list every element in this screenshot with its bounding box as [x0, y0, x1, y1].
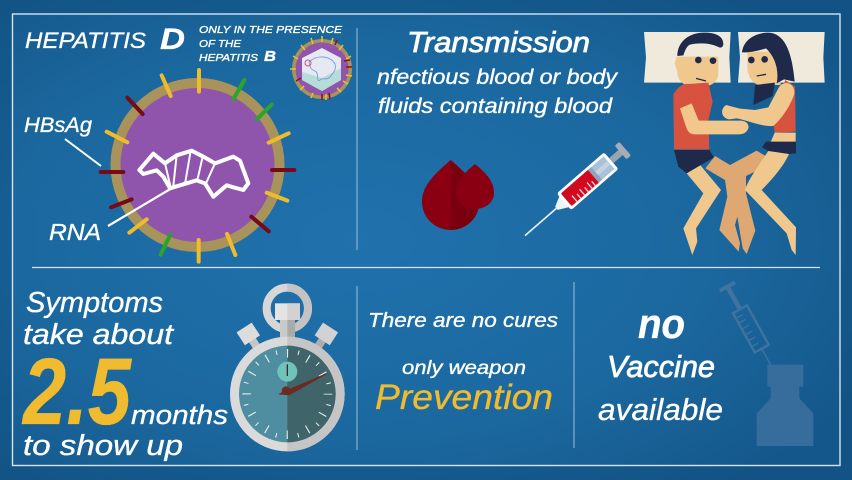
text: transmission routes: fluids containing blood	[378, 95, 613, 118]
text: available: available	[598, 392, 723, 427]
label: HBsAg with pointer: HBsAg	[24, 114, 92, 137]
pillows	[644, 32, 825, 83]
heading: transmission: Transmission	[407, 27, 590, 59]
heading: hepatitis D	[25, 23, 185, 56]
text: symptoms take about	[23, 287, 175, 351]
text: transmission routes	[377, 66, 619, 118]
label: RNA with pointer: RNA	[49, 219, 101, 245]
panel: no vaccine	[598, 282, 813, 446]
panel: transmission	[377, 27, 825, 255]
heading: hepatitis D: HEPATITIS	[25, 28, 146, 53]
text: to show up: to show up	[23, 430, 183, 462]
icon: stopwatch	[230, 288, 345, 451]
text: months: months	[131, 400, 228, 430]
icon: hepatitis B virus	[290, 36, 352, 100]
text: transmission routes: nfectious blood or body	[377, 66, 619, 89]
man	[673, 33, 767, 255]
surface antigen spikes	[101, 70, 294, 262]
text: vaccine: Vaccine	[607, 349, 715, 384]
woman	[722, 33, 796, 255]
panel: hepatitis D virus	[24, 23, 352, 262]
icon: faded syringe and vial	[720, 282, 813, 446]
icon: blood drops	[422, 160, 494, 230]
panel: no cures	[368, 310, 558, 417]
text: symptoms take about: Symptoms	[26, 287, 163, 319]
text: no: no	[638, 300, 685, 347]
text: there are no cures: There are no cures	[368, 310, 558, 332]
number: 2.5: 2.5	[21, 339, 132, 445]
note: only in the presence of hepatitis B: OF THE	[199, 38, 242, 50]
virus body	[110, 78, 284, 252]
RNA strand	[139, 151, 248, 197]
note: only in the presence of hepatitis B	[199, 24, 343, 65]
text: only weapon: only weapon	[402, 358, 526, 379]
label: HBsAg with pointer	[24, 114, 101, 166]
text: symptoms take about: take about	[23, 319, 175, 351]
text: prevention: Prevention	[375, 378, 553, 417]
label: RNA with pointer	[49, 188, 172, 245]
note: only in the presence of hepatitis B: HEPATITIS	[199, 52, 258, 64]
illustration: couple in bed	[644, 32, 825, 255]
panel: symptoms	[21, 287, 345, 462]
icon: syringe	[518, 140, 632, 244]
heading: hepatitis D: D	[160, 23, 185, 56]
note: only in the presence of hepatitis B: ONLY IN THE PRESENCE	[199, 24, 343, 36]
note: only in the presence of hepatitis B: B	[264, 48, 276, 65]
